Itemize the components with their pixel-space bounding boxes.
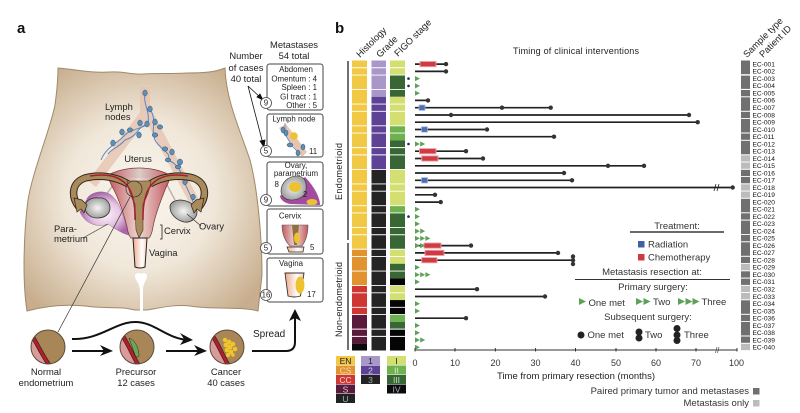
patient IDs: EC-031 [752, 279, 775, 286]
box: lymph node [267, 114, 323, 157]
x axis: 30 [530, 358, 541, 368]
body silhouette [24, 68, 262, 311]
FIGO legend [387, 356, 406, 394]
patient IDs: EC-021 [752, 207, 775, 214]
patient IDs: EC-032 [752, 286, 775, 294]
metastasis resection legend: Metastasis resection at: [602, 267, 702, 278]
anatomy labels: Ovary [199, 220, 224, 232]
patient IDs: EC-008 [752, 112, 775, 119]
lymph tract [92, 87, 194, 201]
primary surgery triangles [415, 76, 430, 350]
metastasis resection legend: One met [588, 330, 624, 341]
metastases heading: Metastases [270, 39, 318, 50]
patient IDs: EC-035 [752, 308, 775, 315]
box: cervix: 5 [310, 243, 315, 252]
ovaries [85, 198, 110, 218]
stage: normal endometrium [19, 329, 74, 388]
stage: normal endometrium: Normal [31, 366, 61, 377]
anatomy labels: Vagina [149, 247, 178, 258]
patient IDs: EC-001 [752, 61, 775, 68]
histology legend: CC [339, 375, 352, 385]
anatomy labels: Cervix [164, 225, 191, 236]
patient IDs: EC-022 [752, 214, 775, 221]
case count badges: 9 [264, 196, 269, 205]
anatomy labels: metrium [54, 233, 88, 244]
patient IDs: EC-014 [752, 156, 775, 163]
x axis: 70 [691, 358, 701, 368]
box: ovary, parametrium: parametrium [274, 169, 319, 178]
treatment legend: Radiation [648, 240, 688, 250]
FIGO legend: I [395, 356, 398, 366]
spread label: Spread [253, 329, 285, 340]
case count badges: 5 [264, 147, 269, 156]
treatment legend: Chemotherapy [648, 252, 711, 264]
chemotherapy bars [420, 62, 444, 263]
x axis: 100 [729, 358, 744, 368]
x axis [412, 347, 744, 382]
fundus highlight [112, 169, 167, 178]
sample type legend: Paired primary tumor and metastases [591, 386, 749, 397]
patient IDs: EC-016 [752, 170, 775, 177]
FIGO stage column [390, 60, 405, 350]
metastasis resection legend: Three [684, 330, 709, 341]
inset marker circle [126, 181, 142, 197]
patient IDs: EC-011 [752, 134, 775, 141]
patient IDs: EC-037 [752, 323, 775, 330]
case count badges: 9 [264, 99, 269, 108]
vulvar slit [135, 273, 147, 311]
metastasis resection legend: Two [653, 297, 670, 308]
patient IDs: EC-028 [752, 258, 775, 264]
number of cases label: 40 total [231, 73, 261, 84]
column headers: Histology [354, 25, 389, 59]
metastases heading: 54 total [279, 50, 309, 61]
sample type legend: Metastasis only [684, 398, 749, 409]
patient IDs: EC-010 [752, 127, 775, 134]
endometrial lining [90, 175, 188, 220]
column headers: Grade [374, 34, 400, 59]
patient IDs: EC-030 [752, 272, 775, 279]
box: cervix: Cervix [279, 212, 301, 220]
fallopian tubes [74, 176, 204, 207]
patient IDs: EC-024 [752, 228, 775, 235]
cervix bracket [160, 225, 162, 239]
histology legend: CS [340, 365, 352, 375]
arrows to case counts [248, 86, 265, 147]
FIGO legend: II [394, 365, 399, 375]
box: abdomen: Spleen : 1 [281, 83, 317, 92]
anatomy labels [54, 101, 224, 258]
leader lines [83, 214, 201, 238]
box: abdomen: Other : 5 [286, 101, 318, 110]
panel label b: b [335, 20, 344, 37]
timeline bars [415, 64, 733, 318]
anatomy labels: Uterus [124, 153, 152, 164]
stage: cancer [207, 329, 245, 388]
histology legend: S [343, 384, 349, 394]
metastasis resection legend: Subsequent surgery: [604, 312, 692, 323]
broad ligament lines [106, 185, 175, 200]
box: abdomen [267, 64, 323, 110]
patient IDs: EC-017 [752, 178, 775, 185]
box: ovary, parametrium [267, 161, 323, 206]
number of cases label: Number [229, 50, 263, 61]
vagina [133, 238, 147, 268]
leader to normal endometrium [58, 197, 130, 332]
box: abdomen: GI tract : 1 [280, 92, 317, 102]
resection markers beside FIGO column [407, 77, 410, 218]
box: cervix [267, 209, 323, 254]
patient IDs: EC-023 [752, 221, 775, 228]
patient IDs: EC-034 [752, 301, 775, 308]
stage: normal endometrium: endometrium [19, 377, 74, 388]
stage: precursor: Precursor [116, 366, 156, 377]
axis break on long bar [714, 184, 719, 191]
histology column [352, 60, 367, 350]
patient IDs: EC-020 [752, 199, 775, 206]
patient IDs: EC-025 [752, 236, 775, 243]
box: lymph node: Lymph node [272, 114, 316, 124]
patient IDs: EC-027 [752, 250, 775, 257]
anatomy labels: nodes [105, 111, 131, 122]
patient IDs: EC-038 [752, 330, 775, 337]
stage: cancer: 40 cases [207, 377, 245, 388]
uterine cavity [127, 181, 151, 238]
subsequent surgery dots [426, 62, 735, 320]
box: ovary, parametrium: 2 [303, 190, 307, 199]
x axis: 50 [611, 358, 621, 368]
patient IDs: EC-029 [752, 265, 775, 272]
x axis: 40 [570, 358, 581, 368]
patient IDs: EC-012 [752, 141, 775, 148]
lymph nodes [111, 90, 195, 200]
x axis: 0 [412, 358, 418, 368]
patient IDs: EC-002 [752, 69, 775, 76]
grade legend: 2 [368, 365, 373, 375]
patient IDs: EC-005 [752, 90, 775, 98]
patient IDs: EC-006 [752, 98, 775, 105]
patient IDs: EC-015 [752, 163, 775, 170]
box: vagina: 17 [307, 290, 316, 299]
anatomy labels: Lymph [105, 101, 133, 112]
subtype labels: Endometrioid [334, 143, 344, 200]
column headers [354, 16, 793, 59]
FIGO legend: III [393, 375, 400, 385]
x axis: 60 [651, 358, 661, 368]
subtype labels: Non-endometrioid [334, 262, 344, 337]
progression arrows [72, 309, 301, 356]
box: abdomen: Abdomen [279, 65, 313, 74]
case count badges [260, 98, 272, 300]
grade legend: 3 [368, 375, 373, 385]
patient IDs: EC-004 [752, 83, 775, 90]
patient IDs: EC-036 [752, 316, 775, 322]
patient IDs: EC-040 [752, 345, 775, 352]
patient IDs: EC-026 [752, 243, 775, 250]
metastases heading [270, 39, 318, 61]
column headers: Sample type [741, 16, 785, 59]
metastasis resection legend: Three [702, 297, 726, 308]
x axis: 20 [490, 358, 501, 368]
histology legend: U [342, 394, 349, 404]
panel label a: a [17, 20, 26, 37]
patient IDs: EC-009 [752, 120, 775, 126]
box: abdomen: Omentum : 4 [271, 74, 318, 84]
box: vagina [267, 258, 323, 302]
stage: precursor [116, 329, 156, 388]
stage: precursor: 12 cases [117, 377, 155, 388]
number of cases label: of cases [229, 62, 264, 73]
box: ovary, parametrium: Ovary, [285, 161, 307, 170]
patient IDs: EC-033 [752, 294, 775, 301]
number of cases label [229, 50, 264, 84]
column headers: Patient ID [757, 23, 793, 59]
subtype labels [334, 61, 348, 350]
case count badges: 16 [262, 291, 271, 300]
x axis: Time from primary resection (months) [497, 371, 655, 382]
treatment legend: Treatment: [654, 221, 700, 232]
lymph vessels [101, 93, 194, 205]
treatment legend [630, 221, 724, 264]
patient IDs: EC-007 [752, 105, 775, 112]
FIGO legend: IV [392, 384, 401, 394]
case count badges: 5 [264, 244, 269, 253]
histology legend [336, 356, 355, 404]
grade legend [361, 356, 380, 385]
sample type column [741, 60, 750, 350]
metastasis resection legend: One met [588, 298, 625, 309]
patient IDs: EC-003 [752, 76, 775, 83]
column headers: FIGO stage [392, 17, 433, 58]
patient IDs: EC-013 [752, 148, 775, 156]
box: ovary, parametrium: 8 [274, 180, 280, 189]
x axis: 10 [450, 358, 460, 368]
grade legend: 1 [368, 356, 373, 366]
uterus [108, 168, 170, 238]
panel a: anatomy illustration [24, 68, 262, 332]
metastasis resection legend [575, 267, 730, 344]
fimbriae [74, 198, 204, 213]
anatomy labels: Para- [54, 223, 77, 234]
patient IDs: EC-039 [752, 337, 775, 344]
sample type legend [591, 386, 760, 409]
patient IDs: EC-018 [752, 185, 775, 192]
histology legend: EN [340, 356, 351, 366]
parametrium [80, 192, 132, 236]
box: vagina: Vagina [279, 259, 304, 268]
chart title: Timing of clinical interventions [513, 46, 640, 56]
metastasis resection legend: Primary surgery: [618, 282, 688, 293]
box: lymph node: 11 [309, 147, 317, 156]
grade column [372, 60, 386, 350]
patient IDs: EC-019 [752, 192, 775, 199]
patient IDs [752, 61, 775, 352]
metastasis resection legend: Two [645, 330, 662, 341]
radiation markers [419, 105, 428, 183]
stage: cancer: Cancer [211, 366, 241, 377]
